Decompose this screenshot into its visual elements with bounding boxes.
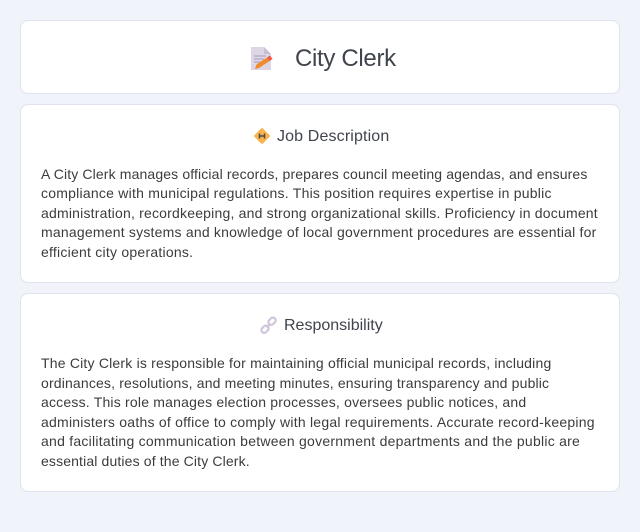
- icon: chain link: [260, 316, 277, 334]
- text block: responsibility: essential duties of the City Clerk.: [41, 453, 250, 469]
- text block: responsibility: access. This role manages election processes, oversees public notices, and: [41, 394, 526, 410]
- text block: job description: management systems and knowledge of local government procedures are essential for: [41, 224, 597, 240]
- panel: title card: [20, 20, 620, 94]
- text block: job description: A City Clerk manages official records, prepares council meeting agendas, and ensures: [41, 166, 587, 182]
- text block: job description: administration, recordkeeping, and strong organizational skills. Proficiency in document: [41, 205, 598, 221]
- text block: responsibility: ordinances, resolutions, and meeting minutes, ensuring transparency and public: [41, 375, 549, 391]
- text block: job description: efficient city operations.: [41, 244, 193, 260]
- panel: job description: [20, 104, 620, 283]
- heading: job description: Job Description: [277, 128, 389, 145]
- title: City Clerk: [295, 45, 396, 72]
- text block: responsibility: The City Clerk is responsible for maintaining official municipal records, including: [41, 355, 551, 371]
- text block: responsibility: and facilitating communication between government departments and the public are: [41, 433, 580, 449]
- panel: responsibility: [20, 293, 620, 492]
- icon: road sign diamond: [254, 128, 270, 144]
- text block: responsibility: administers oaths of office to comply with legal requirements. Accurate record-keeping: [41, 414, 595, 430]
- text block: job description: [41, 166, 598, 260]
- heading: responsibility: Responsibility: [284, 317, 383, 334]
- text block: job description: compliance with municipal regulations. This position requires expertise in public: [41, 185, 552, 201]
- icon: document with pencil: [251, 47, 272, 70]
